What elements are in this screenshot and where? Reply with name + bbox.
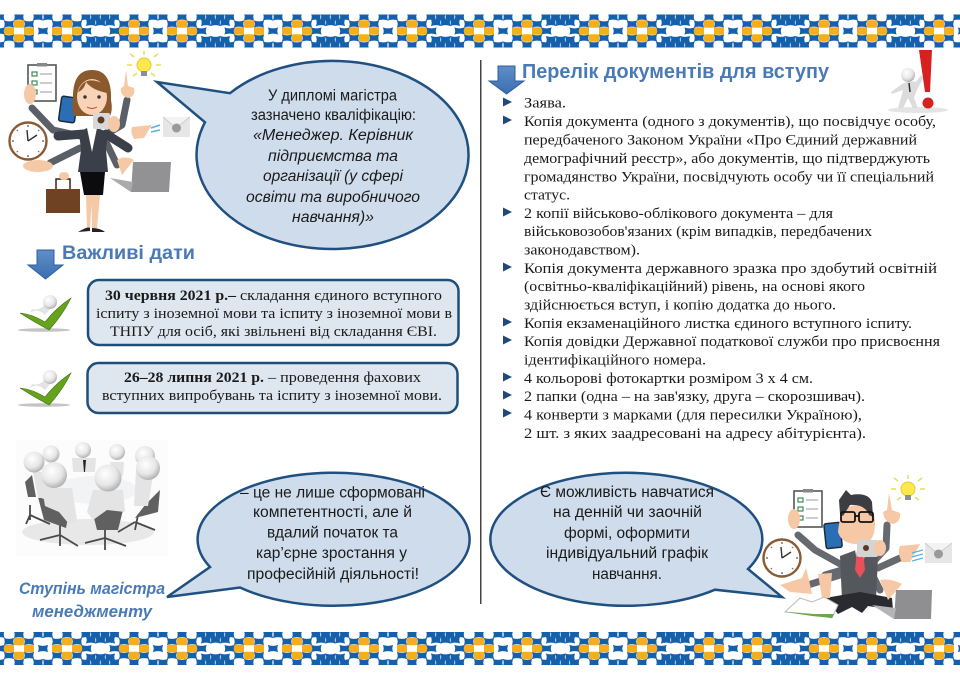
date box: 26-28 July — [88, 363, 458, 413]
caption: master's degree: Ступінь магістра — [19, 580, 165, 598]
illustration: team around table — [16, 440, 168, 556]
heading: list of documents: Перелік документів для вступу — [522, 61, 830, 83]
speech bubble: competencies: вдалий початок та — [267, 524, 398, 542]
heading: important dates: Важливі дати — [62, 242, 195, 264]
speech bubble: competencies — [167, 473, 470, 606]
speech bubble: qualification: підприємства та — [268, 148, 398, 165]
check icon: first date — [18, 295, 71, 332]
document list: здійснюється вступ, і копію додатка до нього. — [524, 298, 836, 314]
column divider — [480, 60, 482, 604]
document list: (освітньо-кваліфікаційний) рівень, на основі якого — [524, 279, 865, 295]
caption: master's degree — [19, 580, 165, 621]
document list: передбаченого Законом України «Про Єдиний державний — [524, 132, 917, 148]
arrow: down to documents — [489, 66, 524, 94]
date box: 30 June: 30 червня 2021 р.– — [105, 288, 237, 304]
date box: 26-28 July: 26–28 липня 2021 р. — [124, 370, 264, 386]
speech bubble: qualification: «Менеджер. Керівник — [253, 127, 414, 144]
speech bubble: study forms: навчання. — [592, 566, 662, 583]
speech bubble: study forms: формі, оформити — [564, 525, 690, 542]
document list: Копія документа державного зразка про здобутий освітній — [524, 261, 937, 277]
document list: 2 копії військово-облікового документа – для — [524, 206, 833, 222]
speech bubble: qualification: організації (у сфері — [263, 168, 404, 185]
illustration: multitasking man — [764, 475, 952, 619]
top ornamental band — [0, 14, 960, 48]
document list — [503, 96, 940, 442]
document list: 4 конверти з марками (для пересилки Україною), — [524, 408, 862, 424]
document list: 2 шт. з яких заадресовані на адресу абітурієнта). — [524, 426, 866, 442]
speech bubble: study forms: Є можливість навчатися — [540, 484, 714, 501]
date box: 30 June: складання єдиного вступного — [240, 288, 442, 304]
date box: 26-28 July: вступних випробувань та іспиту з іноземної мови. — [102, 388, 442, 404]
speech bubble: competencies: – це не лише сформовані — [240, 484, 425, 502]
speech bubble: study forms: на денній чи заочній — [553, 504, 702, 521]
document list: військовозобов'язаних (крім випадків, передбачених — [524, 224, 873, 240]
document list: Копія документа (одного з документів), що посвідчує особу, — [524, 114, 936, 130]
check icon: second date — [18, 370, 71, 407]
document list: 4 кольорові фотокартки розміром 3 х 4 см. — [524, 371, 813, 387]
document list: Копія довідки Державної податкової служби про присвоєння — [524, 334, 940, 350]
icon: figure with exclamation mark — [888, 50, 948, 113]
speech bubble: study forms — [490, 473, 782, 606]
speech bubble: qualification: навчання)» — [292, 209, 374, 226]
document list: 2 папки (одна – на зав'язку, друга – скорозшивач). — [524, 389, 865, 405]
document list: Копія екзаменаційного листка єдиного вступного іспиту. — [524, 316, 912, 332]
document list: громадянство України, посвідчують особу чи її спеціальний — [524, 170, 934, 186]
document list: статус. — [524, 188, 570, 204]
bottom ornamental band — [0, 632, 960, 665]
document list: ідентифікаційного номера. — [524, 352, 706, 368]
speech bubble: study forms: індивідуальний графік — [546, 545, 708, 562]
date box: 26-28 July: – проведення фахових — [267, 370, 422, 386]
document list: демографічний реєстр», або документів, що підтверджують — [524, 151, 930, 167]
speech bubble: competencies: кар’єрне зростання у — [256, 545, 407, 562]
document list: Заява. — [524, 96, 566, 112]
arrow: down to dates — [28, 250, 63, 279]
speech bubble: competencies: професійній діяльності! — [247, 566, 419, 583]
speech bubble: qualification: зазначено кваліфікацію: — [251, 107, 416, 124]
date box: 30 June: ТНПУ для осіб, які звільнені від складання ЄВІ. — [110, 324, 437, 340]
speech bubble: competencies: компетентності, але й — [253, 504, 412, 521]
document list: законодавством). — [524, 242, 640, 258]
date box: 30 June — [88, 280, 458, 345]
caption: master's degree: менеджменту — [32, 603, 153, 621]
speech bubble: qualification: освіти та виробничого — [246, 189, 420, 206]
speech bubble: qualification — [157, 61, 469, 249]
illustration: multitasking woman — [10, 51, 190, 232]
date box: 30 June: іспиту з іноземної мови та іспиту з іноземної мови в — [96, 306, 452, 322]
speech bubble: qualification: У дипломі магістра — [268, 88, 397, 104]
